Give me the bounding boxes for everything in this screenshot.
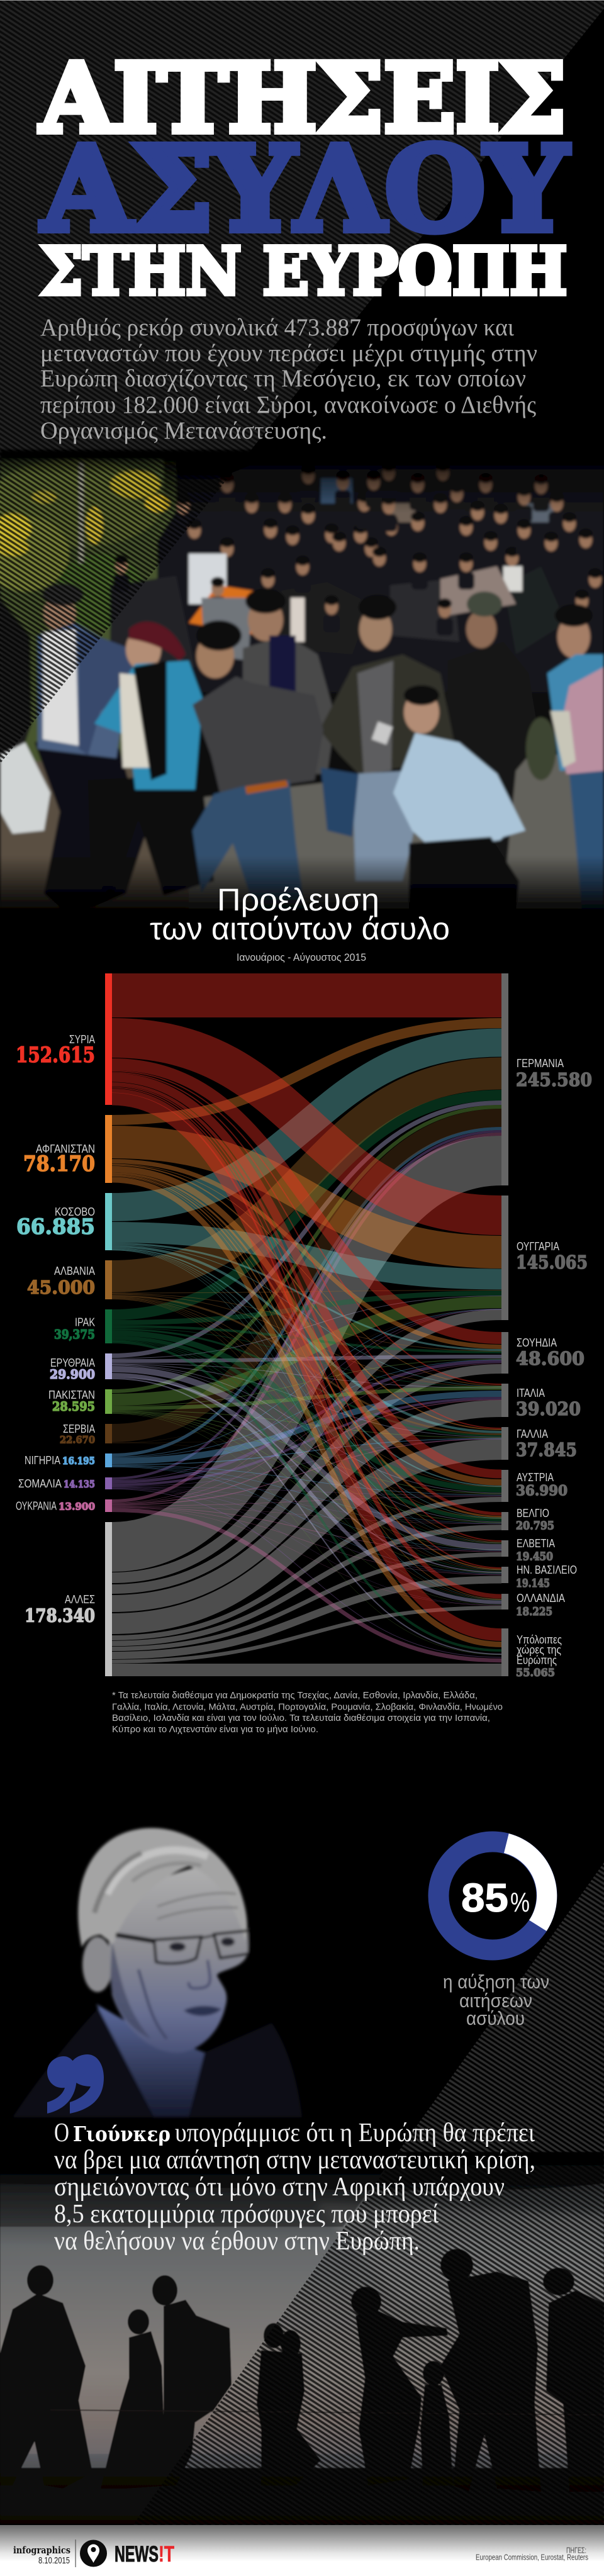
label: United Kingdom: ΗΝ. ΒΑΣΙΛΕΙΟ: [517, 1564, 577, 1576]
label: Nigeria: ΝΙΓΗΡΙΑ: [25, 1454, 60, 1467]
footnote: [112, 1690, 503, 1735]
bold name: Γιούνκερ: [73, 2122, 171, 2146]
Juncker quote text: 8,5 εκατομμύρια πρόσφυγες που μπορεί: [54, 2200, 439, 2229]
label: Ukraine: ΟΥΚΡΑΝΙΑ: [16, 1500, 57, 1513]
donut white segment: [504, 1834, 557, 1931]
label: Rest of Europe: χώρες της: [517, 1644, 561, 1656]
label: Switzerland: 19.450: [516, 1550, 553, 1563]
label: Italy: 39.020: [516, 1398, 581, 1420]
label: Austria: [516, 1471, 568, 1499]
icon: quotation mark: [47, 2054, 104, 2114]
origin bars: [105, 973, 112, 1676]
label: Hungary: 145.065: [516, 1252, 588, 1273]
intro text: [40, 314, 537, 444]
intro text: Αριθμός ρεκόρ συνολικά 473.887 προσφύγων και: [40, 314, 514, 341]
flows from Afghanistan: [112, 1023, 501, 1645]
man in grey hoodie: [193, 620, 323, 909]
shirt: [96, 2004, 204, 2117]
intro text: περίπου 182.000 είναι Σύροι, ανακοίνωσε ο Διεθνής: [40, 391, 537, 418]
photo stripes overlay: [0, 450, 250, 764]
date: 8.10.2015: [38, 2555, 70, 2566]
label: Rest of Europe: Υπόλοιπες: [517, 1633, 562, 1646]
face: [108, 1864, 248, 2053]
label: Somalia: ΣΟΜΑΛΙΑ: [18, 1477, 62, 1490]
donut chart 85%: [439, 1834, 557, 2029]
striped background triangle: top: [0, 0, 604, 764]
flows from Pakistan: [112, 1107, 501, 1655]
flows from Serbia: [112, 1117, 501, 1494]
label: Nigeria: 16.195: [62, 1455, 95, 1467]
intro text: Ευρώπη διασχίζοντας τη Μεσόγειο, εκ των οποίων: [40, 365, 526, 392]
label: Pakistan: ΠΑΚΙΣΤΑΝ: [48, 1389, 95, 1401]
flows from Others: [112, 1160, 501, 1670]
label: Nigeria: [25, 1454, 95, 1467]
label: Somalia: [18, 1477, 95, 1490]
flows from Eritrea: [112, 1102, 501, 1654]
origin labels: [16, 1033, 95, 1626]
intro text: μεταναστών που έχουν περάσει μέχρι στιγμής στην: [40, 340, 537, 367]
man in black leather jacket: [447, 591, 556, 900]
label: Rest of Europe: Ευρώπης: [517, 1654, 557, 1666]
label: Italy: ΙΤΑΛΙΑ: [517, 1387, 545, 1399]
label: Germany: ΓΕΡΜΑΝΙΑ: [517, 1057, 564, 1070]
Juncker quote text: να βρει μια απάντηση στην μεταναστευτική κρίση,: [54, 2146, 535, 2175]
label: Kosovo: 66.885: [16, 1214, 95, 1240]
footnote: Βασίλειο, Ισλανδία και είναι για τον Ιούλιο. Τα τελευταία διαθέσιμα στοιχεία για την Ισπανία,: [112, 1713, 490, 1723]
label: Belgium: 20.795: [516, 1519, 554, 1533]
footnote: Γαλλία, Ιταλία, Λετονία, Μάλτα, Αυστρία, Πορτογαλία, Ρουμανία, Σλοβακία, Φινλανδία, Ηνωμένο: [112, 1701, 503, 1713]
label: Syria: [16, 1033, 95, 1068]
label: Sweden: 48.600: [516, 1348, 584, 1369]
label: Italy: [516, 1387, 581, 1420]
intro text: Οργανισμός Μετανάστευσης.: [40, 417, 327, 444]
label: Iraq: 39,375: [54, 1326, 95, 1341]
label: Serbia: ΣΕΡΒΙΑ: [63, 1423, 95, 1435]
sankey chart: [105, 973, 508, 1676]
title line 2: ΑΣΥΛΟΥ: [41, 121, 569, 257]
label: Eritrea: 29.900: [50, 1367, 95, 1382]
label: Sweden: ΣΟΥΗΔΙΑ: [517, 1336, 557, 1349]
label: Iraq: ΙΡΑΚ: [75, 1316, 95, 1329]
title: [39, 42, 569, 310]
label: United Kingdom: [516, 1564, 577, 1590]
label: Eritrea: ΕΡΥΘΡΑΙΑ: [50, 1357, 95, 1369]
flows from Ukraine: [112, 1134, 501, 1660]
flows from Kosovo: [112, 1043, 501, 1599]
destination labels: [516, 1057, 592, 1679]
sources: [476, 2546, 588, 2562]
label: Kosovo: ΚΟΣΟΒΟ: [55, 1206, 95, 1218]
label: Pakistan: [48, 1389, 95, 1414]
flows from Somalia: [112, 1131, 501, 1657]
photo: silhouettes of refugees: [0, 2152, 604, 2525]
forehead wrinkles: [157, 1893, 238, 1919]
eyes: [169, 1942, 186, 1951]
donut value: 85: [461, 1875, 508, 1920]
label: Afghanistan: 78.170: [23, 1151, 95, 1177]
label: Others: ΑΛΛΕΣ: [65, 1593, 95, 1606]
label: Afghanistan: [23, 1143, 95, 1177]
destination bars: [501, 973, 508, 1676]
logo: NEWS IT: NEWS: [115, 2542, 159, 2567]
suit: [13, 2007, 154, 2117]
label: Eritrea: [50, 1357, 95, 1382]
hair: [78, 1828, 247, 1947]
label: Somalia: 14.135: [64, 1478, 95, 1490]
label: Rest of Europe: 55.065: [516, 1667, 555, 1679]
chart subtitle: Ιανουάριος - Αύγουστος 2015: [237, 951, 366, 963]
label: Switzerland: ΕΛΒΕΤΙΑ: [517, 1537, 555, 1550]
photo bottom fade: [0, 2454, 604, 2525]
Juncker quote text: να θελήσουν να έρθουν στην Ευρώπη.: [54, 2227, 420, 2256]
label: Albania: [27, 1265, 95, 1298]
label: Others: 178.340: [25, 1604, 95, 1626]
Juncker quote text: σημειώνοντας ότι μόνο στην Αφρική υπάρχουν: [54, 2173, 505, 2202]
chart heading: Προέλευση: [217, 882, 379, 917]
label: Belgium: ΒΕΛΓΙΟ: [517, 1507, 549, 1520]
label: Syria: ΣΥΡΙΑ: [69, 1033, 95, 1046]
man in olive jacket: [320, 595, 454, 881]
flows from Iraq: [112, 1095, 501, 1650]
label: Germany: [516, 1057, 592, 1090]
footer background: [0, 2525, 604, 2576]
label: Pakistan: 28.595: [52, 1399, 95, 1414]
flows from Albania: [112, 1073, 501, 1599]
label: Albania: 45.000: [27, 1277, 95, 1298]
footer: [0, 2525, 604, 2576]
flows from Nigeria: [112, 1129, 501, 1574]
label: France: 37.845: [516, 1439, 577, 1460]
nose and mouth: [189, 1960, 210, 1988]
man in plaid shirt: [35, 583, 145, 909]
label: Iraq: [54, 1316, 95, 1341]
sky: [0, 2152, 604, 2467]
label: Afghanistan: ΑΦΓΑΝΙΣΤΑΝ: [36, 1143, 95, 1155]
footnote: Κύπρο και το Λιχτενστάιν είναι για το μήνα Ιούνιο.: [112, 1724, 318, 1735]
label: Switzerland: [516, 1537, 555, 1563]
sources: ΠΗΓΕΣ:: [566, 2546, 586, 2555]
flows from Syria: [112, 995, 501, 1635]
donut value: %: [510, 1887, 530, 1918]
Juncker quote text: Ο: [54, 2119, 69, 2148]
mid row crowd: [110, 547, 603, 667]
label: Netherlands: ΟΛΛΑΝΔΙΑ: [517, 1592, 565, 1604]
road: [0, 749, 604, 909]
label: Rest of Europe: [516, 1633, 562, 1679]
donut caption: [443, 1971, 549, 2029]
label: France: [516, 1428, 577, 1460]
title line 3: ΣΤΗΝ ΕΥΡΩΠΗ: [40, 233, 568, 310]
striped background triangle: bottom: [133, 1862, 604, 2525]
donut caption: η αύξηση των: [443, 1971, 549, 1993]
label: Hungary: ΟΥΓΓΑΡΙΑ: [517, 1240, 559, 1253]
label: Sweden: [516, 1336, 584, 1369]
Juncker quote text: [54, 2119, 535, 2256]
foliage: [0, 459, 176, 761]
label: United Kingdom: 19.145: [516, 1577, 550, 1590]
photo base: [0, 450, 604, 909]
chart heading: [150, 882, 450, 963]
donut value: [461, 1875, 530, 1920]
glasses: [116, 1930, 250, 1963]
donut caption: αιτήσεων: [459, 1990, 532, 2012]
far-left person and bag: [0, 598, 50, 834]
logo: NEWS IT: !T: [159, 2542, 174, 2567]
donut caption: ασύλου: [466, 2007, 525, 2029]
label: Netherlands: 18.225: [516, 1605, 552, 1618]
background crowd: [157, 459, 604, 692]
label: Belgium: [516, 1507, 554, 1533]
donut blue ring: [439, 1842, 547, 1950]
label: Austria: ΑΥΣΤΡΙΑ: [517, 1471, 554, 1484]
woman in blue cardigan: [88, 622, 214, 895]
label: Albania: ΑΛΒΑΝΙΑ: [54, 1265, 95, 1277]
label: Syria: 152.615: [16, 1043, 95, 1068]
boy in light blue jacket: [372, 685, 525, 909]
chart heading: των αιτούντων άσυλο: [150, 911, 450, 946]
ear: [82, 1937, 113, 1992]
silhouette photo stripes overlay: [133, 2152, 604, 2525]
face shading: [110, 1941, 151, 2039]
label: Austria: 36.990: [516, 1483, 568, 1499]
icon: map pin: [80, 2540, 107, 2567]
infographics label: infographics: [13, 2545, 70, 2556]
label: France: ΓΑΛΛΙΑ: [517, 1428, 548, 1440]
horizon water: [0, 2454, 604, 2469]
wire across the horizon: [50, 2410, 604, 2415]
label: Hungary: [516, 1240, 588, 1273]
label: Others: [25, 1593, 95, 1626]
ground: [0, 2468, 604, 2525]
portrait: Juncker: [13, 1828, 302, 2117]
silhouettes: [0, 2249, 604, 2492]
label: Netherlands: [516, 1592, 565, 1618]
label: Serbia: 22.670: [60, 1433, 95, 1446]
footnote: * Τα τελευταία διαθέσιμα για Δημοκρατία της Τσεχίας, Δανία, Εσθονία, Ιρλανδία, Ελλάδα,: [112, 1690, 478, 1701]
label: Ukraine: 13.900: [59, 1501, 95, 1513]
photo: crowd of refugees: [0, 450, 604, 917]
photo top and bottom fades: [164, 450, 604, 513]
man in grey jacket, behind: [243, 588, 335, 774]
label: Germany: 245.580: [516, 1069, 592, 1090]
label: Serbia: [60, 1423, 95, 1446]
title line 1: ΑΙΤΗΣΕΙΣ: [39, 42, 566, 154]
upper left dark overlay: [0, 2152, 397, 2227]
man in blue and white jacket: [547, 604, 604, 910]
Juncker quote text: υπογράμμισε ότι η Ευρώπη θα πρέπει: [175, 2119, 535, 2148]
